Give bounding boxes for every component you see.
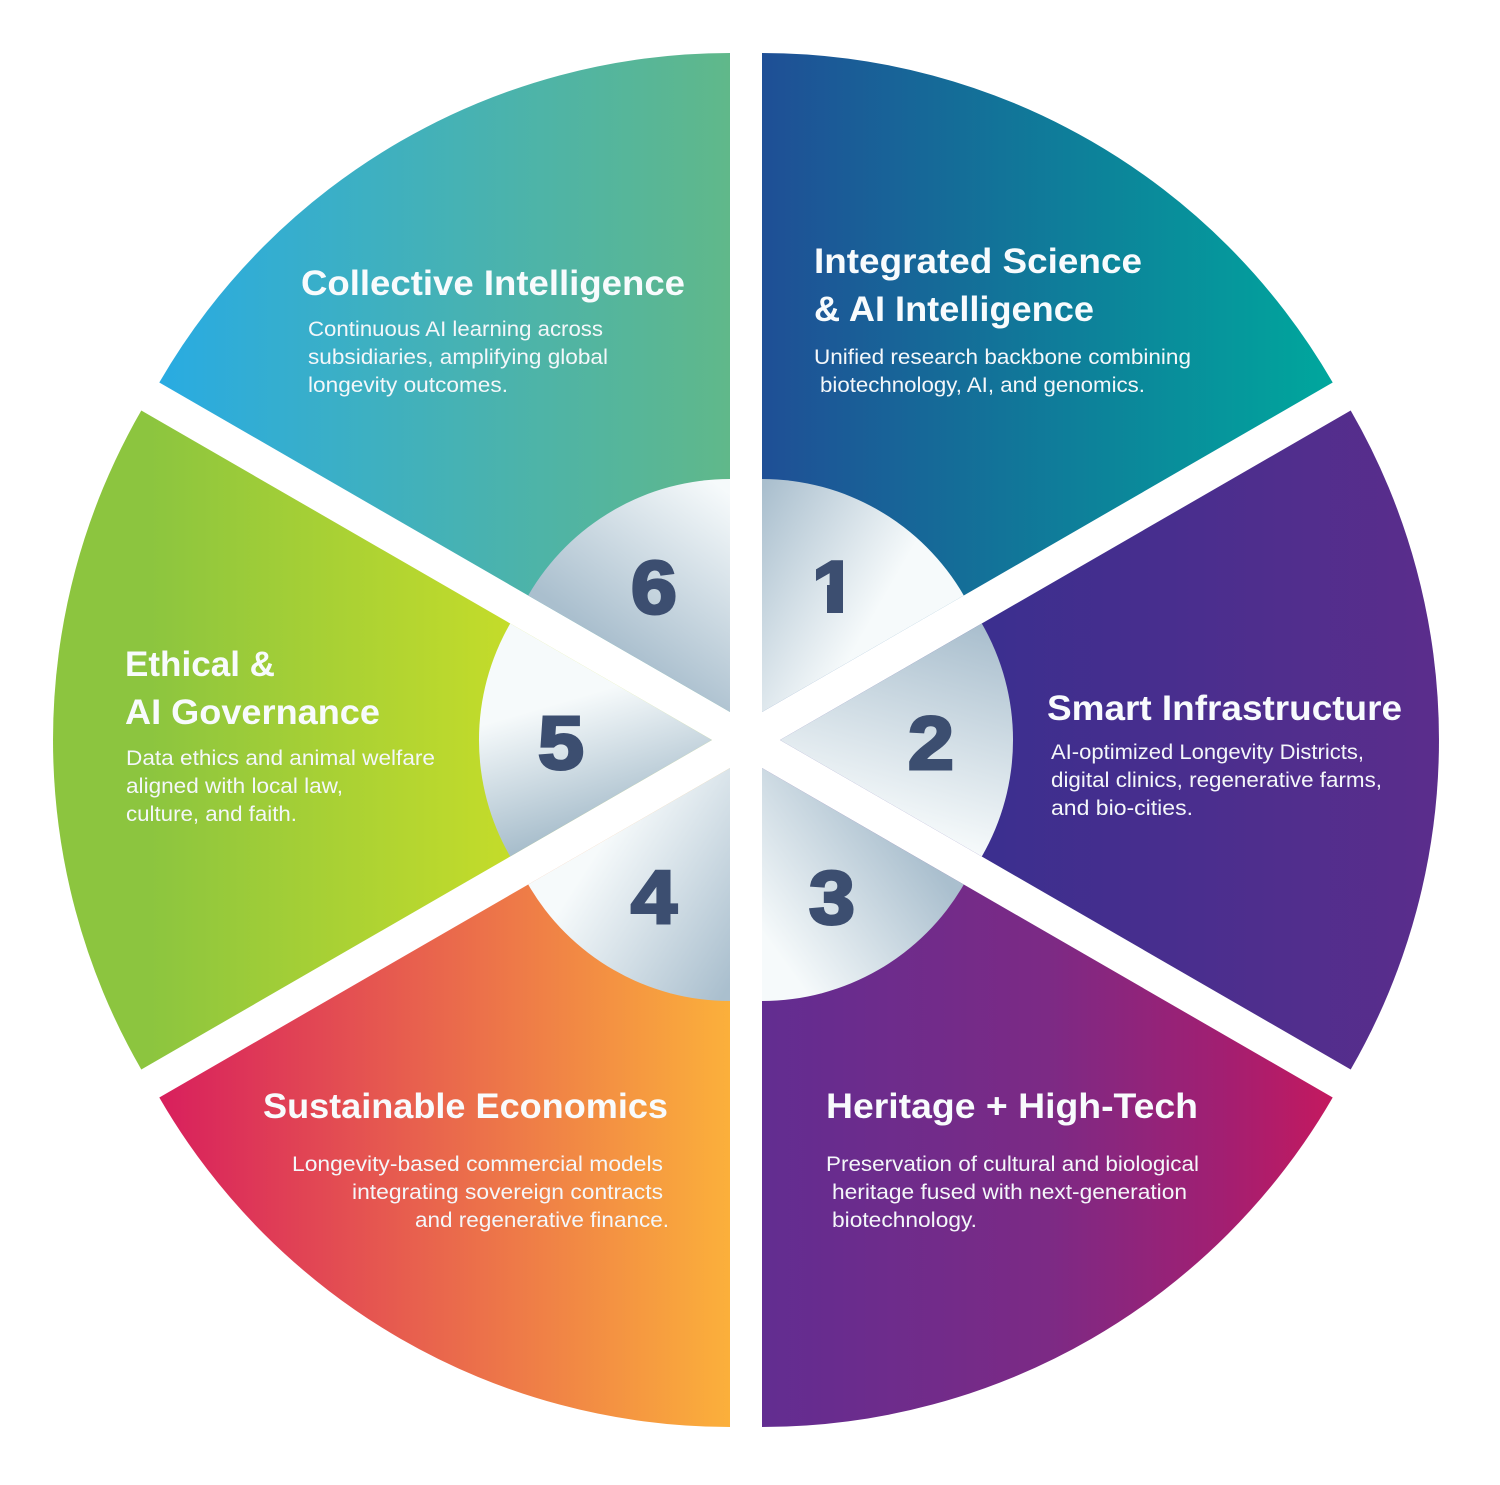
body text: and bio-cities. — [1051, 797, 1193, 820]
body text — [292, 1153, 669, 1232]
number 1: 1 — [812, 546, 858, 630]
heading: Smart Infrastructure — [1047, 689, 1402, 728]
panel: Sustainable Economics — [159, 768, 730, 1427]
segment 6 wedge — [159, 53, 730, 712]
body text: biotechnology. — [832, 1209, 977, 1232]
hub wedge 3 — [762, 768, 964, 1001]
body text: digital clinics, regenerative farms, — [1051, 769, 1382, 792]
body text — [1051, 741, 1382, 820]
body text: Unified research backbone combining — [814, 346, 1191, 369]
heading: Integrated Science — [814, 242, 1142, 281]
body text: Longevity-based commercial models — [292, 1153, 663, 1176]
segment 5 wedge — [53, 410, 712, 1070]
body text: heritage fused with next-generation — [832, 1181, 1187, 1204]
heading: Ethical & — [125, 645, 275, 684]
number 3: 3 — [809, 856, 855, 940]
body text: subsidiaries, amplifying global — [308, 346, 608, 369]
number 5: 5 — [538, 701, 584, 785]
number 2: 2 — [908, 701, 954, 785]
hub wedge 4 — [528, 768, 730, 1001]
number 4: 4 — [631, 855, 677, 939]
segment 4 wedge — [159, 768, 730, 1427]
body text: biotechnology, AI, and genomics. — [820, 374, 1145, 397]
heading: Sustainable Economics — [263, 1087, 668, 1126]
body text: integrating sovereign contracts — [352, 1181, 663, 1204]
body text: Preservation of cultural and biological — [826, 1153, 1199, 1176]
body text: aligned with local law, — [126, 775, 343, 798]
hub wedge 5 — [479, 624, 712, 856]
heading — [125, 645, 380, 732]
body text: Continuous AI learning across — [308, 318, 603, 341]
panel: Integrated Science & AI Intelligence — [762, 53, 1333, 712]
heading: & AI Intelligence — [814, 290, 1094, 329]
body text — [308, 318, 608, 397]
panel: Heritage + High-Tech — [762, 768, 1333, 1427]
body text — [814, 346, 1191, 397]
segment 3 wedge — [762, 768, 1333, 1427]
body text: culture, and faith. — [126, 803, 297, 826]
number 1 — [816, 560, 843, 613]
panel: Ethical & AI Governance — [53, 410, 712, 1070]
hub wedge 2 — [780, 624, 1013, 856]
heading — [814, 242, 1142, 329]
body text — [126, 747, 435, 826]
number 6: 6 — [631, 546, 677, 630]
body text: AI-optimized Longevity Districts, — [1051, 741, 1364, 764]
body text — [826, 1153, 1199, 1232]
panel: Collective Intelligence — [159, 53, 730, 712]
heading: Collective Intelligence — [301, 264, 685, 303]
panel: Smart Infrastructure — [780, 410, 1439, 1070]
body text: longevity outcomes. — [308, 374, 508, 397]
body text: Data ethics and animal welfare — [126, 747, 435, 770]
segment 1 wedge — [762, 53, 1333, 712]
hub wedge 1 — [762, 479, 964, 712]
heading: AI Governance — [125, 693, 380, 732]
body text: and regenerative finance. — [415, 1209, 669, 1232]
heading: Heritage + High-Tech — [826, 1087, 1198, 1126]
hub wedge 6 — [528, 479, 730, 712]
segment 2 wedge — [780, 410, 1439, 1070]
